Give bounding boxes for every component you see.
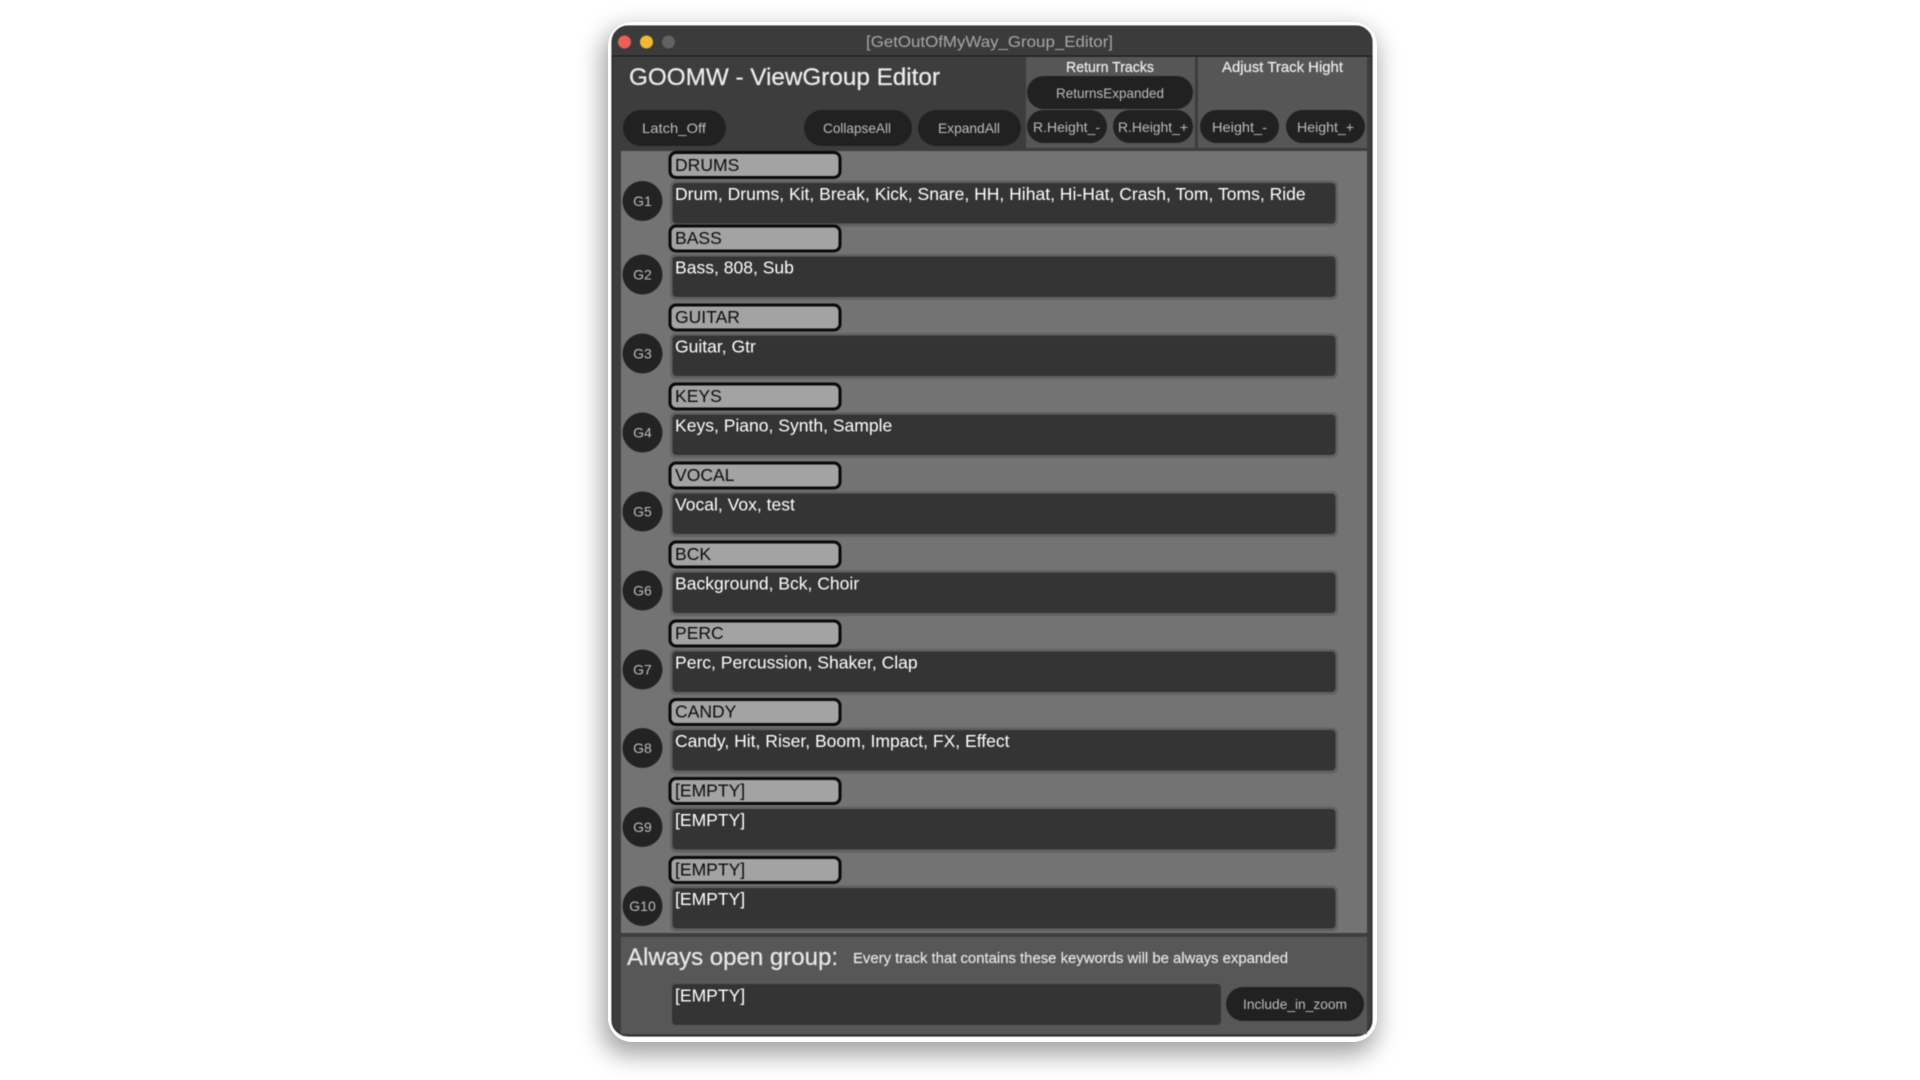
group row G5: G5 [633,504,652,520]
group row G2 [622,226,1338,300]
group row G10: [EMPTY] [675,860,745,880]
group row G10: [EMPTY] [675,889,745,909]
group row G7: PERC [675,623,724,643]
group row G6: Background, Bck, Choir [675,574,859,594]
adjust track height heading: Adjust Track Hight [1222,59,1344,76]
button: R.Height plus [1113,110,1193,143]
panel: groups [621,151,1367,933]
button: Height minus: Height_- [1212,119,1267,135]
button: R.Height plus: R.Height_+ [1118,119,1188,135]
group row G8 [622,700,1338,774]
group row G1: G1 [633,193,652,209]
group row G3: Guitar, Gtr [675,336,756,356]
group row G10 [622,858,1338,932]
heading: GOOMW - ViewGroup Editor [629,64,940,91]
button: Height minus [1200,110,1279,143]
group row G3: GUITAR [675,307,740,327]
group row G7 [622,621,1338,695]
group row G4: KEYS [675,386,722,406]
group row G2: BASS [675,228,722,248]
group row G5: VOCAL [675,465,735,485]
group row G7: G7 [633,662,652,678]
button: CollapseAll [804,110,912,146]
button: ReturnsExpanded [1027,76,1193,109]
button: Include_in_zoom: Include_in_zoom [1243,996,1347,1012]
button: R.Height minus: R.Height_- [1033,119,1100,135]
group row G1: DRUMS [675,155,739,175]
button: ReturnsExpanded: ReturnsExpanded [1056,85,1164,101]
panel: adjust track height [1198,57,1367,148]
group row G9: G9 [633,819,652,835]
group row G5 [622,463,1338,537]
group row G8: CANDY [675,702,737,722]
group row G4: Keys, Piano, Synth, Sample [675,416,892,436]
return tracks heading: Return Tracks [1066,59,1154,76]
group row G3 [622,305,1338,379]
group row G7: Perc, Percussion, Shaker, Clap [675,652,918,672]
group row G9 [622,778,1338,852]
always open keywords field [672,984,1221,1025]
group row G2: Bass, 808, Sub [675,258,794,278]
group row G3: G3 [633,346,652,362]
window title: [GetOutOfMyWay_Group_Editor] [866,34,1113,51]
panel: return tracks [1026,57,1195,148]
group row G5: Vocal, Vox, test [675,494,795,514]
button: Height plus: Height_+ [1297,119,1354,135]
group row G10: G10 [629,898,656,914]
group row G6 [622,542,1338,616]
group row G1: Drum, Drums, Kit, Break, Kick, Snare, HH, Hihat, Hi-Hat, Crash, Tom, Toms, Ride [675,184,1306,204]
group row G6: G6 [633,582,652,598]
group row G8: Candy, Hit, Riser, Boom, Impact, FX, Effect [675,731,1010,751]
button: ExpandAll [918,110,1021,146]
group row G9: [EMPTY] [675,780,745,800]
button: Height plus [1286,110,1365,143]
button: CollapseAll: CollapseAll [823,120,891,136]
window shadow and white frame [608,22,1377,1042]
button: ExpandAll: ExpandAll [938,120,1000,136]
button: Latch_Off [623,110,726,146]
window body [612,26,1372,1036]
group row G9: [EMPTY] [675,810,745,830]
group row G4 [622,384,1338,458]
group row G2: G2 [633,266,652,282]
group row G1 [622,152,1338,226]
title bar [612,26,1372,56]
group row G8: G8 [633,740,652,756]
group row G6: BCK [675,544,711,564]
always open description: Every track that contains these keywords will be always expanded [853,950,1288,967]
panel: always open group [621,937,1367,1034]
group row G4: G4 [633,424,652,440]
button: R.Height minus [1027,110,1107,143]
always open keywords field: [EMPTY] [675,986,745,1006]
button: Include_in_zoom [1226,987,1364,1021]
button: Latch_Off: Latch_Off [642,120,706,136]
always open heading: Always open group: [627,944,838,971]
window controls [618,36,675,48]
